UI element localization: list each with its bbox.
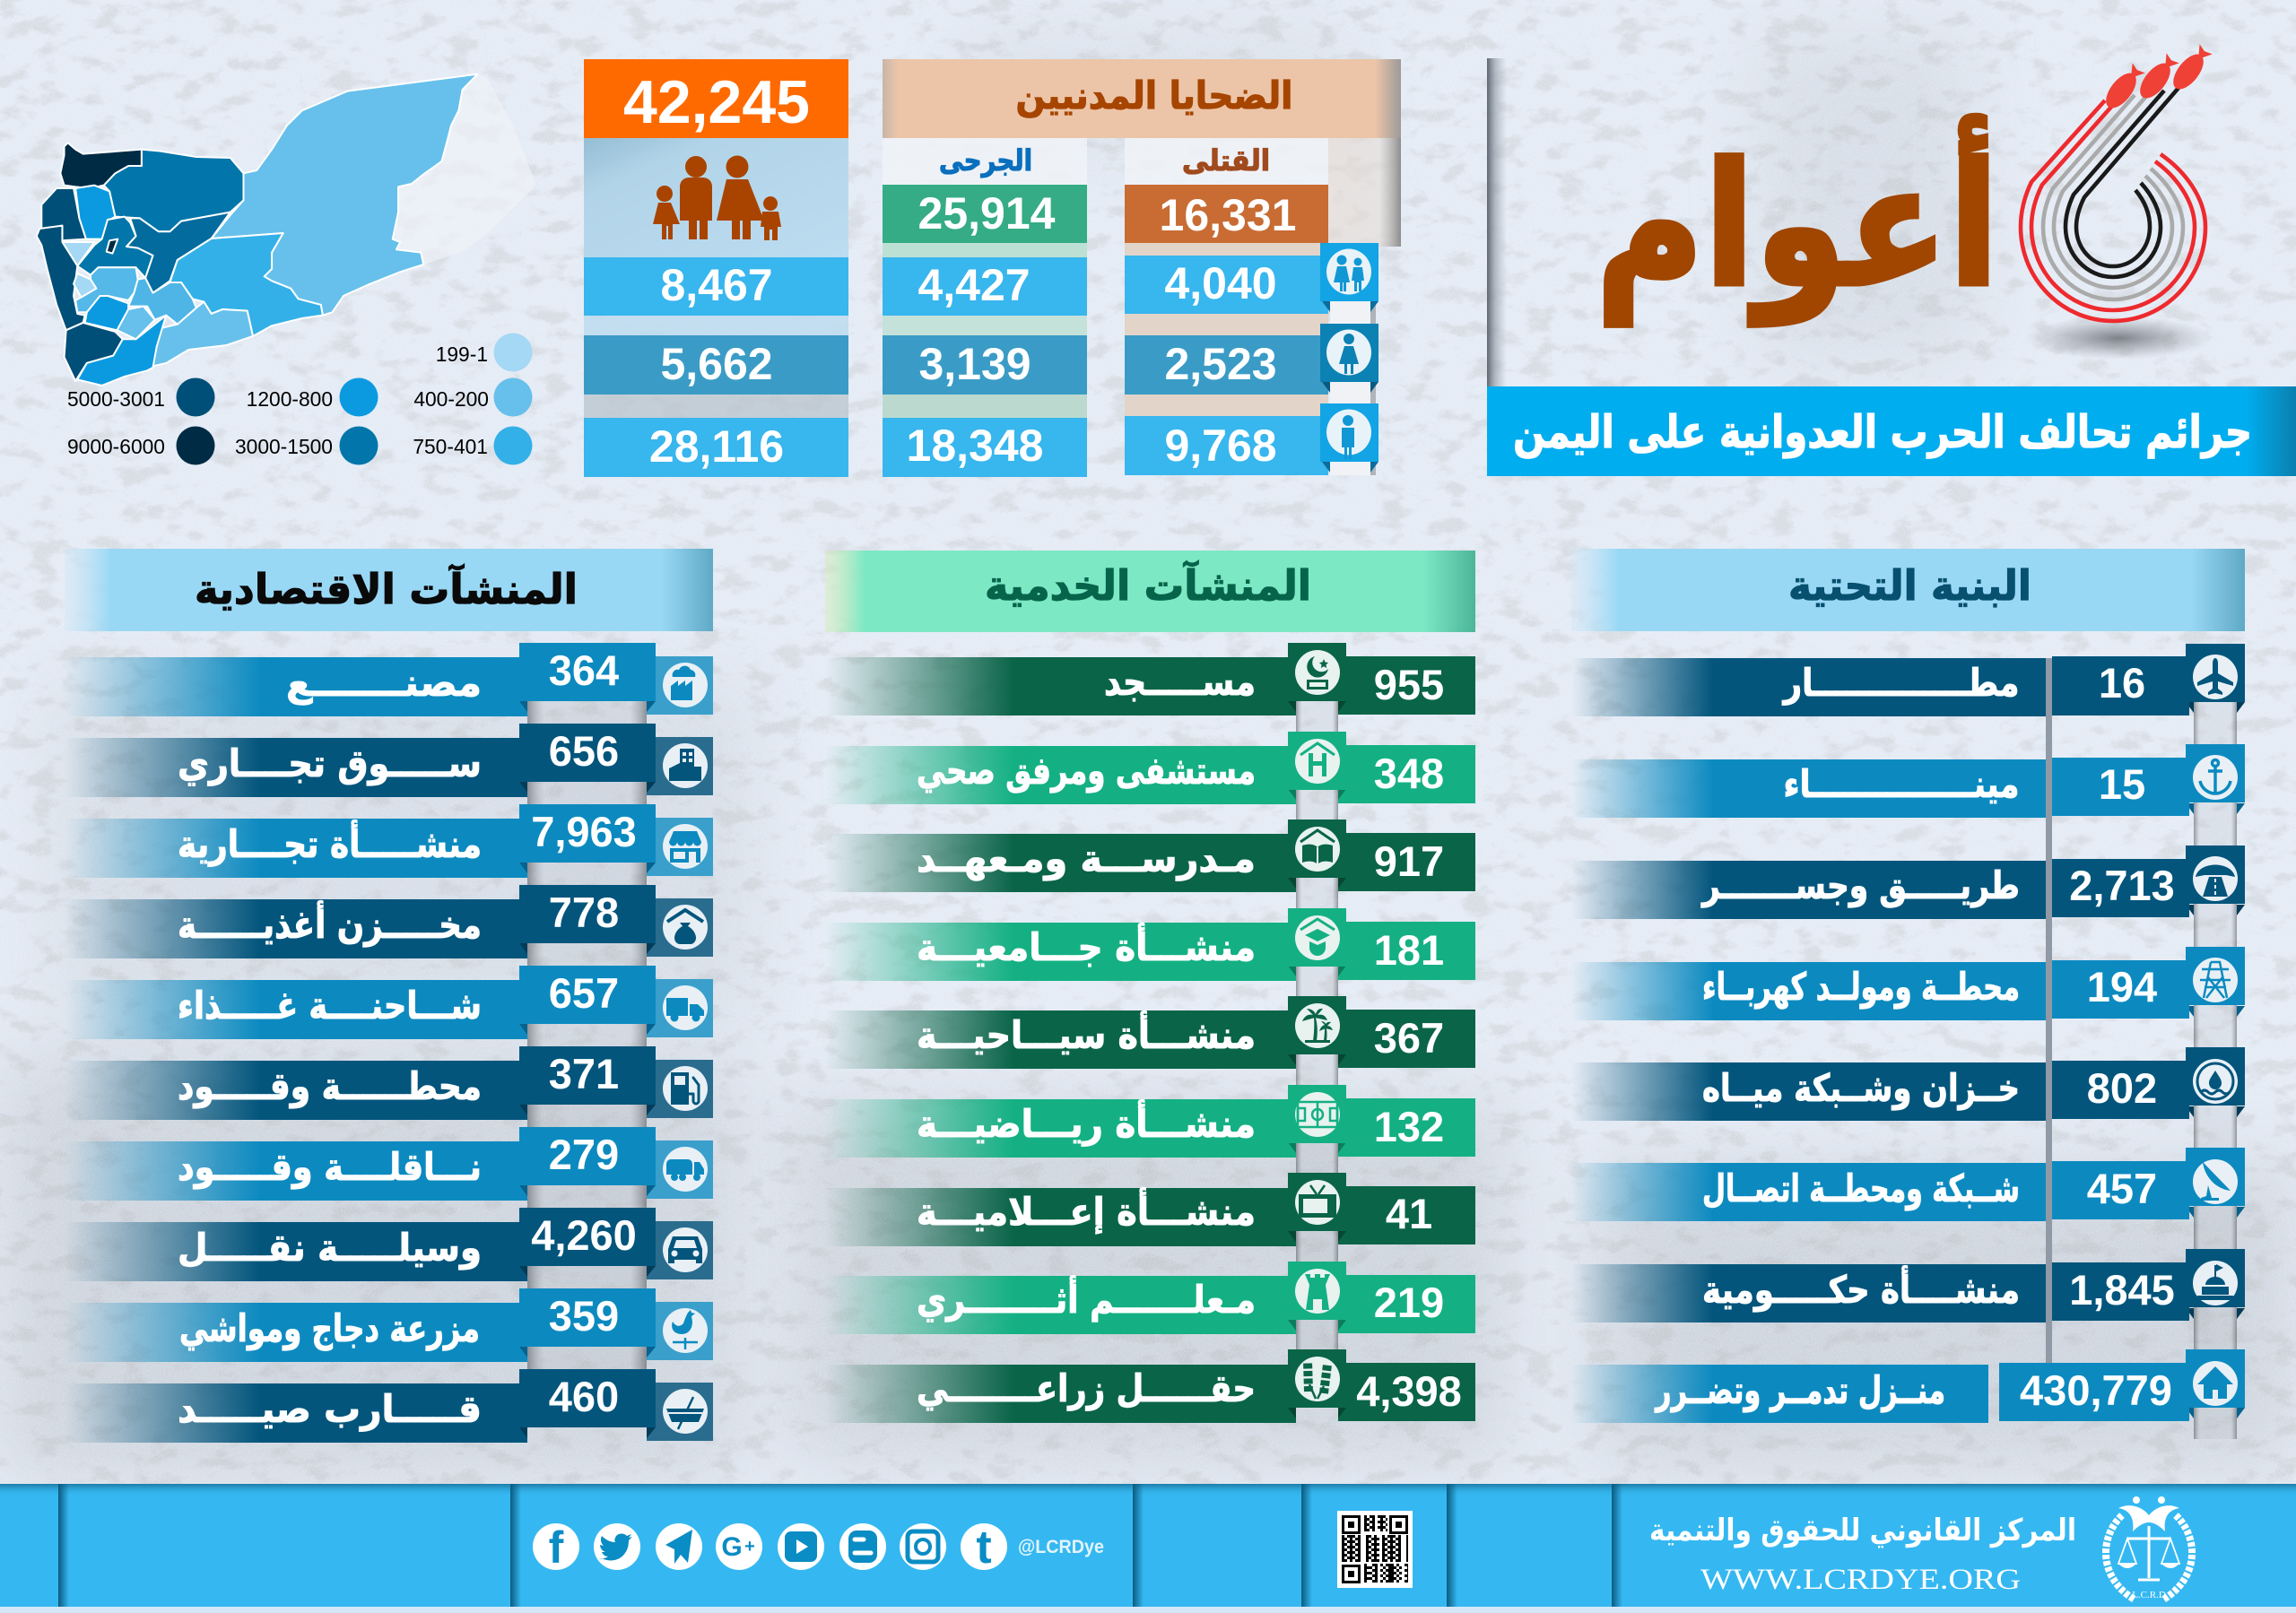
row: media facility: 41 xyxy=(1386,1190,1432,1237)
row: transport vehicle: وسيلـــــة نقـــــل xyxy=(178,1226,482,1270)
row values: 8,467 xyxy=(660,260,773,310)
row: government facility xyxy=(1571,1249,2245,1322)
row: transport vehicle xyxy=(65,1208,713,1281)
wounded rows: 3,139 xyxy=(918,339,1031,389)
row: food truck xyxy=(65,966,713,1039)
row: tourist facility: منشـــأة سيـــاحيـــة xyxy=(917,1010,1256,1057)
row: fishing boat: 460 xyxy=(549,1373,619,1420)
row: tourist facility: 367 xyxy=(1374,1014,1444,1062)
row: telecom network xyxy=(1571,1148,2245,1221)
icon: water xyxy=(2193,1059,2238,1104)
map legend: 750-401 xyxy=(413,435,488,458)
shadow under emblem xyxy=(2024,317,2213,360)
row: food warehouse: مخـــــزن أغذيــــــة xyxy=(178,900,482,948)
killed total xyxy=(1125,185,1328,243)
row: hospital: 348 xyxy=(1374,750,1444,797)
total number: 42,245 xyxy=(623,68,810,136)
icon: twitter xyxy=(594,1523,640,1570)
heading: infrastructure: البنية التحتية xyxy=(1788,561,2031,610)
map of Yemen by governorate xyxy=(37,74,536,386)
row: heritage site: 219 xyxy=(1374,1279,1444,1326)
emblem: number six with rockets xyxy=(2021,43,2214,321)
footer band xyxy=(0,1484,2296,1613)
row: mosque: 955 xyxy=(1374,661,1444,708)
icon: wheat xyxy=(1295,1357,1340,1401)
icon: warehouse xyxy=(663,905,708,950)
row: market: ســـــوق تجــــاري xyxy=(178,741,482,786)
row: factory: مصنـــــــع xyxy=(286,661,482,706)
row: telecom network: شــبكة ومحطــة اتصــال xyxy=(1702,1166,2020,1211)
icon: google plus xyxy=(716,1523,762,1570)
panel: service facilities xyxy=(825,551,1475,1423)
heading: economic facilities: المنشآت الاقتصادية xyxy=(195,564,578,613)
row: media facility: منشـــأة إعـــلاميـــة xyxy=(917,1187,1256,1235)
row: farm field xyxy=(825,1349,1475,1423)
icon: boat xyxy=(663,1389,708,1434)
panel: civilian victims header: الضحايا المدنيين xyxy=(1015,74,1293,118)
killed total: 16,331 xyxy=(1160,190,1296,240)
row: fuel station xyxy=(65,1046,713,1120)
wounded total: 25,914 xyxy=(918,188,1056,238)
row: airport: 16 xyxy=(2099,659,2145,707)
killed rows: 2,523 xyxy=(1164,339,1277,389)
row: university: منشـــأة جـــامعيـــة xyxy=(917,923,1256,969)
icon: tumblr: t xyxy=(976,1522,992,1574)
icon: television xyxy=(1295,1180,1340,1225)
row: mosque xyxy=(825,643,1475,715)
row: farm field: حقــــــل زراعــــــــي xyxy=(917,1366,1256,1411)
panel: killed column xyxy=(1125,138,1328,475)
row: road and bridge: 2,713 xyxy=(2069,862,2175,909)
icon: house xyxy=(2193,1361,2238,1406)
icon: power tower xyxy=(2193,958,2238,1002)
icon: university xyxy=(1295,915,1340,960)
row: school: مـدرســـة ومـعهــد xyxy=(917,837,1256,881)
icon: family xyxy=(653,156,781,240)
row: hospital: مستشفى ومرفق صحي xyxy=(917,749,1256,793)
icon: google plus: + xyxy=(744,1537,755,1557)
heading: years: أعوام xyxy=(1596,116,1999,326)
row: fishing boat: قـــــارب صيـــــد xyxy=(178,1387,482,1431)
wounded rows xyxy=(883,257,1087,477)
icon: blogger xyxy=(839,1523,886,1570)
QR code xyxy=(1337,1511,1413,1588)
row: farm field: 4,398 xyxy=(1356,1367,1462,1415)
panel: wounded column xyxy=(883,138,1087,477)
icon: factory xyxy=(663,663,708,707)
social icons xyxy=(533,1522,1104,1574)
row: port: 15 xyxy=(2099,760,2145,808)
row: poultry and livestock farm xyxy=(65,1288,713,1362)
heading: wounded: الجرحى xyxy=(939,143,1032,178)
row: market: 656 xyxy=(549,727,619,775)
row: telecom network: 457 xyxy=(2087,1165,2157,1212)
row values: 5,662 xyxy=(660,339,773,389)
icon: airplane xyxy=(2193,655,2238,699)
icon: store xyxy=(663,824,708,869)
row: fuel tanker: نـــاقلــــة وقـــــود xyxy=(178,1145,482,1190)
map legend xyxy=(67,334,533,464)
row: damaged homes: 430,779 xyxy=(2020,1366,2172,1414)
icon: truck xyxy=(663,985,708,1030)
row: school: 917 xyxy=(1374,837,1444,885)
row: fuel station: 371 xyxy=(549,1050,619,1097)
row: sports facility: 132 xyxy=(1374,1103,1444,1150)
icon: stadium xyxy=(1295,1092,1340,1137)
icon: car xyxy=(663,1227,708,1272)
heading: service facilities xyxy=(825,551,1475,632)
icon: man xyxy=(1320,403,1378,473)
icon: facebook: f xyxy=(549,1522,564,1573)
row: road and bridge xyxy=(1571,846,2245,919)
row: power station: محطــة ومولــد كهربــاء xyxy=(1702,965,2020,1010)
icon: fuel pump xyxy=(663,1066,708,1111)
row: government facility: منشــــأة حكـــــومية xyxy=(1702,1265,2020,1313)
icon: organisation logo xyxy=(2106,1496,2192,1600)
row: damaged homes: منــزل تدمــر وتضــرر xyxy=(1655,1368,1945,1413)
row: commercial facility: 7,963 xyxy=(531,808,637,855)
icon: google plus: G xyxy=(721,1532,743,1562)
wounded rows: 18,348 xyxy=(907,421,1043,471)
icon: rooster xyxy=(663,1308,708,1353)
row: university xyxy=(825,908,1475,981)
icon: road xyxy=(2193,856,2238,901)
icon: mosque xyxy=(1295,650,1340,695)
heading: infrastructure xyxy=(1571,549,2245,631)
row: commercial facility: منشـــــأة تجــــارية xyxy=(178,820,482,866)
row: port xyxy=(1571,744,2245,818)
icon: tumblr xyxy=(961,1522,1007,1574)
victim category tabs xyxy=(1320,243,1378,475)
row: poultry and livestock farm: مزرعة دجاج ومواشي xyxy=(179,1306,480,1351)
row: water tank and network: 802 xyxy=(2087,1064,2157,1112)
panel: economic facilities xyxy=(65,549,713,1443)
map legend: 3000-1500 xyxy=(235,435,333,458)
row: factory: 364 xyxy=(549,646,619,694)
row: food warehouse xyxy=(65,885,713,958)
map legend: 400-200 xyxy=(413,387,489,411)
row: sports facility xyxy=(825,1085,1475,1158)
wounded total xyxy=(883,185,1087,243)
row: school xyxy=(825,820,1475,892)
row: hospital xyxy=(825,732,1475,804)
row: heritage site: مـعلـــــــم أثــــــــري xyxy=(917,1275,1256,1322)
map legend: 1200-800 xyxy=(247,387,333,411)
row: food truck: شـــاحنــــة غـــــذاء xyxy=(178,984,482,1028)
row: transport vehicle: 4,260 xyxy=(531,1211,637,1259)
row: fuel tanker xyxy=(65,1127,713,1201)
row: water tank and network: خــزان وشــبكة ميــاه xyxy=(1702,1066,2020,1111)
panel: infrastructure xyxy=(1571,549,2245,1439)
row: airport: مطــــــــــــــار xyxy=(1782,661,2020,705)
map legend: 9000-6000 xyxy=(67,435,165,458)
map legend: 5000-3001 xyxy=(67,387,165,411)
row: mosque: مســـــجد xyxy=(1104,660,1256,704)
map legend: 199-1 xyxy=(436,343,488,366)
killed rows xyxy=(1125,256,1328,475)
icon: palm trees xyxy=(1295,1003,1340,1048)
row: fuel tanker: 279 xyxy=(549,1131,619,1178)
icon: telegram xyxy=(656,1523,702,1570)
icon: children xyxy=(1320,243,1378,312)
icon: instagram xyxy=(900,1523,946,1570)
wounded rows: 4,427 xyxy=(918,260,1031,310)
icon: anchor xyxy=(2193,755,2238,800)
row values xyxy=(584,257,848,477)
heading: killed: القتلى xyxy=(1182,143,1270,178)
panel: total victims column xyxy=(584,59,848,477)
killed rows: 9,768 xyxy=(1164,421,1277,471)
killed rows: 4,040 xyxy=(1164,258,1277,308)
row: fishing boat xyxy=(65,1369,713,1443)
row: market xyxy=(65,724,713,797)
row: poultry and livestock farm: 359 xyxy=(549,1292,619,1340)
row: food warehouse: 778 xyxy=(549,889,619,936)
row: university: 181 xyxy=(1374,926,1444,974)
row: factory xyxy=(65,643,713,716)
row: tourist facility xyxy=(825,996,1475,1069)
row: power station xyxy=(1571,947,2245,1020)
row: damaged homes xyxy=(1571,1349,2245,1423)
icon: government building xyxy=(2193,1261,2238,1305)
row: power station: 194 xyxy=(2087,963,2157,1010)
row values: 28,116 xyxy=(649,421,784,472)
row: media facility xyxy=(825,1173,1475,1246)
row: water tank and network xyxy=(1571,1047,2245,1121)
row: commercial facility xyxy=(65,804,713,878)
icon: satellite dish xyxy=(2193,1159,2238,1204)
row: sports facility: منشـــأة ريـــاضيـــة xyxy=(917,1099,1256,1146)
icon: hospital xyxy=(1295,739,1340,784)
title banner xyxy=(1487,386,2296,476)
row: food truck: 657 xyxy=(549,969,619,1017)
row: government facility: 1,845 xyxy=(2069,1266,2175,1314)
icon: mall xyxy=(663,743,708,788)
row: fuel station: محطــــــة وقـــــود xyxy=(178,1064,482,1109)
icon: school xyxy=(1295,827,1340,872)
row: road and bridge: طريـــــق وجســـــــر xyxy=(1700,863,2020,908)
panel: civilian victims header xyxy=(883,59,1401,247)
title block: 6 years xyxy=(1487,43,2214,386)
row: airport xyxy=(1571,644,2245,716)
row: heritage site xyxy=(825,1262,1475,1334)
row: port: مينـــــــــــــــاء xyxy=(1783,762,2020,806)
heading: service facilities: المنشآت الخدمية xyxy=(985,560,1311,610)
organisation name: المركز القانوني للحقوق والتنمية xyxy=(1649,1513,2076,1548)
website: WWW.LCRDYE.ORG xyxy=(1700,1564,2021,1596)
icon: organisation logo: L.C.R.D xyxy=(2132,1590,2166,1600)
icon: tower xyxy=(1295,1269,1340,1314)
icon: woman xyxy=(1320,324,1378,393)
icon: tanker xyxy=(663,1147,708,1192)
heading: economic facilities xyxy=(65,549,713,631)
icon: facebook xyxy=(533,1522,579,1573)
icon: youtube xyxy=(778,1523,824,1570)
handle: @LCRDye xyxy=(1018,1537,1104,1557)
